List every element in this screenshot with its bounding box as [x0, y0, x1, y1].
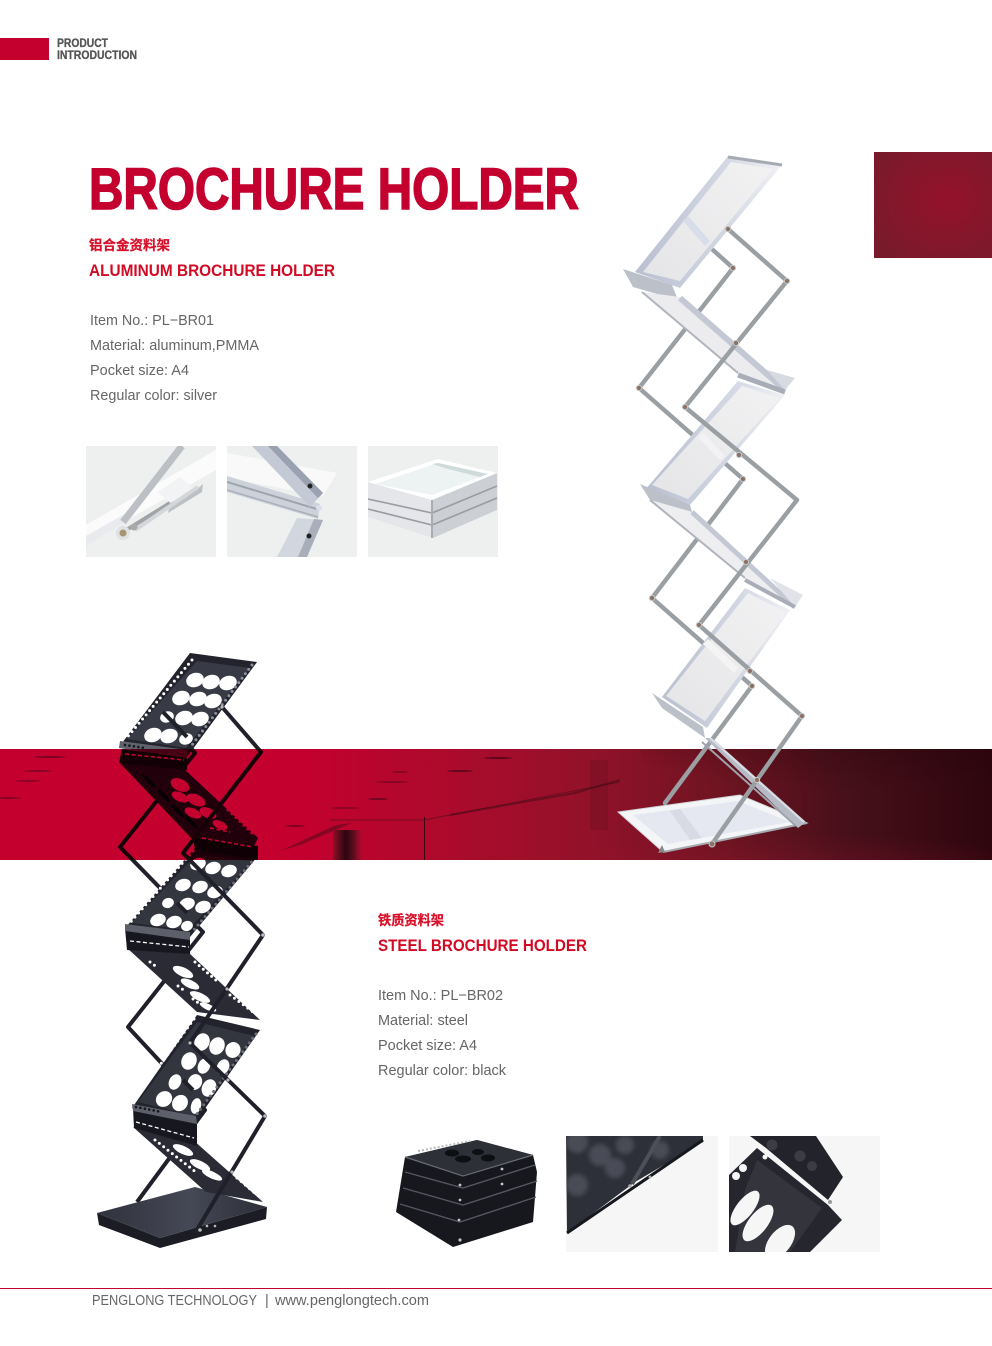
- steel specification list: Regular color: black: [378, 1062, 506, 1079]
- photo: aluminum folded stack: [368, 446, 498, 557]
- footer rule: [0, 1288, 992, 1289]
- aluminum English heading: ALUMINUM BROCHURE HOLDER: [89, 262, 335, 280]
- pivots: [636, 226, 805, 847]
- steel pocket 5: [132, 1015, 260, 1124]
- red banner: [0, 749, 992, 860]
- decorative red square: [874, 152, 992, 258]
- pocket 4: [650, 500, 803, 607]
- section label: [57, 38, 137, 62]
- steel base: [97, 1187, 267, 1248]
- steel pocket 2: [119, 749, 258, 860]
- footer text: www.penglongtech.com: [274, 1293, 429, 1309]
- steel pocket 4: [125, 928, 260, 1020]
- header accent block: [0, 38, 49, 60]
- aluminum specification list: Regular color: silver: [90, 387, 217, 404]
- pocket 3: [640, 381, 785, 512]
- steel pocket 1: [119, 653, 257, 758]
- photo: aluminum frame corner detail: [227, 446, 357, 557]
- section label: PRODUCT: [57, 38, 108, 50]
- photo: steel pocket close-up: [729, 1136, 880, 1252]
- steel specification list: [378, 987, 506, 1079]
- base frame: [618, 795, 807, 853]
- steel English heading: STEEL BROCHURE HOLDER: [378, 937, 587, 955]
- rods: front scissor chain: [685, 229, 802, 844]
- steel specification list: Pocket size: A4: [378, 1037, 477, 1054]
- panel: steel product details: [378, 912, 587, 1079]
- steel rods: front chain: [183, 707, 265, 1233]
- steel specification list: Item No.: PL−BR02: [378, 987, 503, 1004]
- steel rods: rear chain: [120, 712, 205, 1202]
- aluminum Chinese heading: 铝合金资料架: [89, 237, 170, 253]
- aluminum specification list: Material: aluminum,PMMA: [90, 337, 259, 354]
- pocket 2: [642, 292, 795, 392]
- pocket 5: [652, 588, 790, 738]
- steel brochure holder: [97, 653, 267, 1248]
- steel specification list: Material: steel: [378, 1012, 468, 1029]
- footer text: |: [265, 1293, 269, 1309]
- title: BROCHURE HOLDER: [89, 157, 579, 222]
- pocket 6: [702, 738, 806, 828]
- photo: steel folded stack: [396, 1140, 537, 1247]
- steel pocket 6: [133, 1108, 263, 1202]
- pocket 1: [623, 156, 782, 300]
- steel pocket 3: [125, 848, 258, 940]
- footer text: [92, 1293, 429, 1309]
- aluminum specification list: Item No.: PL−BR01: [90, 312, 214, 329]
- photo: aluminum hinge detail: [86, 446, 216, 557]
- panel: aluminum product details: [89, 237, 335, 404]
- steel pivots: [188, 705, 267, 1232]
- aluminum specification list: Pocket size: A4: [90, 362, 189, 379]
- rods: rear scissor chain: [639, 250, 752, 803]
- footer text: PENGLONG TECHNOLOGY: [92, 1293, 257, 1309]
- photo: steel hinge detail: [566, 1131, 718, 1252]
- steel Chinese heading: 铁质资料架: [378, 912, 444, 928]
- aluminum specification list: [90, 312, 259, 404]
- section label: INTRODUCTION: [57, 50, 137, 62]
- aluminum brochure holder: [618, 156, 807, 853]
